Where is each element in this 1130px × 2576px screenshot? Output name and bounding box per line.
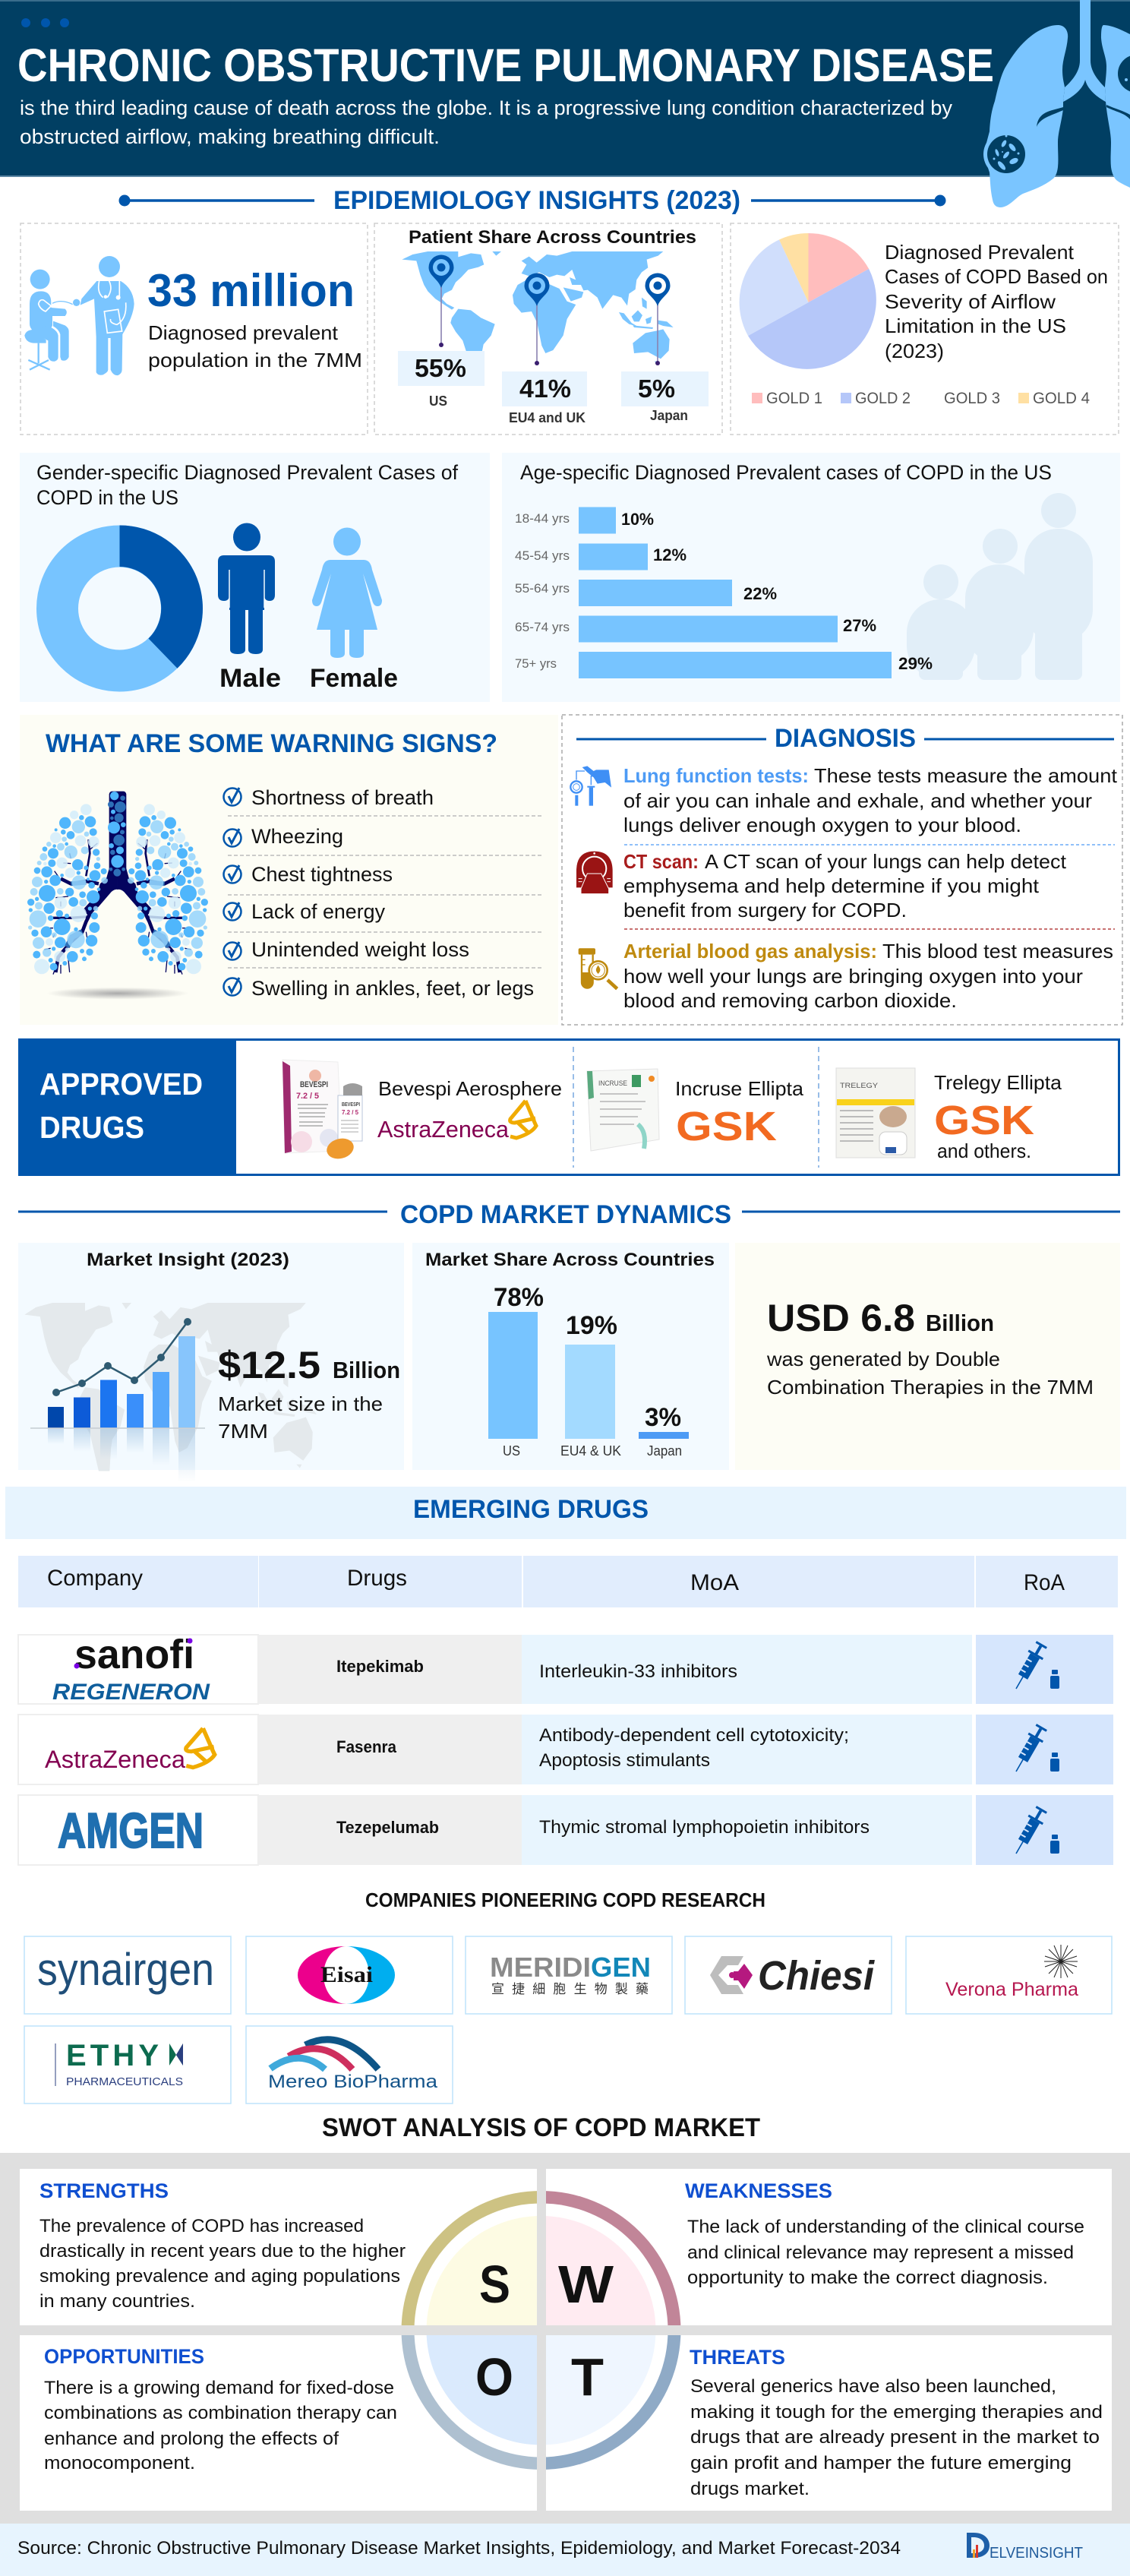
stat: US: 55% [415, 354, 466, 382]
SWOT circle [20, 2169, 1112, 2511]
item: lack of energy: Lack of energy [251, 900, 385, 923]
diagnosis text: CT scan [623, 850, 1067, 921]
bar chart: age groups: 18-44 yrs [515, 511, 570, 526]
world map [402, 251, 674, 366]
growth chart [24, 1303, 317, 1482]
diagnosis text: lung function: of air you can inhale and exhale, and whether your [623, 789, 1092, 812]
icon: lung function test [570, 766, 611, 806]
heading: epidemiology insights [118, 186, 946, 215]
row: Itepekimab: Itepekimab [336, 1657, 424, 1676]
source line: Source: Chronic Obstructive Pulmonary Disease Market Insights, Epidemiology, and Market Forecast-2034 [17, 2538, 901, 2559]
panel: double combination therapies [735, 1243, 1120, 1470]
diagnosis text: CT scan: CT scan: [623, 850, 699, 873]
stat: EU4 and UK: 41% [519, 375, 571, 403]
panel: age-specific cases [502, 453, 1120, 702]
logo: Eisai: Eisai [320, 1962, 373, 1987]
drug: Trelegy Ellipta: Trelegy Ellipta [934, 1071, 1062, 1094]
opportunities: OPPORTUNITIES [44, 2345, 204, 2368]
pie title: Severity of Airflow [885, 290, 1056, 313]
row: Itepekimab [18, 1632, 1113, 1705]
diagnosis text: CT scan: A CT scan of your lungs can help detect [705, 850, 1067, 873]
logo: GSK: GSK [676, 1104, 777, 1149]
product image: Trelegy [836, 1068, 915, 1158]
diagnosis text: blood gas: how well your lungs are bringing oxygen into your [623, 965, 1083, 988]
pie title: Limitation in the US [885, 314, 1066, 337]
panel: warning signs: WHAT ARE SOME WARNING SIGNS? [46, 729, 497, 758]
threats: drugs market. [690, 2479, 810, 2499]
logo: AstraZeneca [45, 1728, 215, 1773]
logo: Ethyx Pharmaceuticals: PHARMACEUTICALS [66, 2075, 183, 2088]
item: swelling: Swelling in ankles, feet, or legs [251, 977, 534, 1000]
panel: market share across countries [412, 1243, 729, 1470]
panel: approved drugs: DRUGS [39, 1110, 144, 1145]
logo: Mereo BioPharma [246, 2026, 453, 2103]
threats: Several generics have also been launched, [690, 2376, 1056, 2397]
diagnosis text: lung function: Lung function tests: [623, 764, 809, 787]
legend: GOLD 4 [1033, 390, 1090, 407]
logo: AstraZeneca [377, 1101, 536, 1143]
stat: Japan [621, 371, 709, 423]
bar chart: age groups: 12% [653, 545, 687, 564]
panel: 33 million [21, 223, 368, 435]
diagnosis text: lung function: lungs deliver enough oxygen to your blood. [623, 814, 1021, 836]
diagnosis text: lung function [623, 764, 1118, 836]
panel: warning signs [20, 715, 558, 1025]
footer [0, 2524, 1130, 2576]
panel: SWOT analysis [0, 2153, 1130, 2524]
icon: syringe [1008, 1640, 1059, 1693]
logo: Meridigen: 宣捷細胞生物製藥 [491, 1982, 649, 1996]
stat: market size [218, 1344, 400, 1443]
logo: Amgen: AMGEN [58, 1803, 204, 1858]
strengths: The prevalence of COPD has increased [39, 2216, 364, 2236]
subtitle [20, 96, 952, 148]
stat: Japan: 5% [638, 375, 675, 403]
bar chart: market share: 19% [566, 1311, 617, 1340]
pie title: Diagnosed Prevalent [885, 241, 1075, 264]
family silhouettes [907, 493, 1093, 680]
panel: diagnosis [562, 715, 1122, 1025]
logo grid: companies [24, 1936, 1112, 2103]
logo: GSK: GSK [934, 1098, 1034, 1143]
product image: Trelegy: TRELEGY [840, 1082, 878, 1089]
logo: Meridigen: GEN [591, 1952, 651, 1983]
icon: doctor and patient [24, 256, 134, 375]
threats: drugs that are already present in the market to [690, 2427, 1100, 2448]
strengths: STRENGTHS [39, 2179, 169, 2202]
legend [752, 390, 1090, 407]
panel: double combination therapies: was generated by Double [766, 1348, 1000, 1370]
threats: making it tough for the emerging therapies and [690, 2402, 1103, 2423]
bar chart: market share: Japan [647, 1443, 682, 1459]
icon: blood gas analysis [579, 948, 617, 989]
pie title: Cases of COPD Based on [885, 265, 1108, 288]
SWOT circle: O [475, 2347, 513, 2407]
table header: MoA [690, 1570, 739, 1595]
table header: RoA [1024, 1570, 1065, 1595]
logo: synairgen: synairgen [37, 1944, 214, 1995]
bar chart: market share: EU4 & UK [560, 1443, 621, 1459]
diagnosis text: blood gas: blood and removing carbon dioxide. [623, 989, 957, 1012]
logo: Meridigen [466, 1936, 672, 2014]
strengths: smoking prevalence and aging populations [39, 2266, 400, 2287]
product image: Bevespi: BEVESPI [300, 1080, 328, 1089]
logo: Ethyx Pharmaceuticals: ETHY [66, 2039, 159, 2072]
logo: AstraZeneca: AstraZeneca [377, 1116, 510, 1143]
row: Fasenra: Antibody-dependent cell cytotoxicity; [539, 1725, 849, 1746]
diagnosis text: CT scan: benefit from surgery for COPD. [623, 899, 907, 921]
stat: market size: $12.5 [218, 1344, 320, 1386]
threats: gain profit and hamper the future emerging [690, 2453, 1072, 2473]
icon: lungs [983, 0, 1130, 207]
logo: Eisai [246, 1936, 453, 2014]
diagnosis text: CT scan: emphysema and help determine if you might [623, 874, 1040, 897]
logo: Ethyx Pharmaceuticals [24, 2026, 231, 2103]
SWOT circle: W [558, 2255, 614, 2314]
diagnosis text: blood gas [623, 940, 1113, 1012]
icon: syringe [1008, 1805, 1059, 1858]
row: Itepekimab: Interleukin-33 inhibitors [539, 1661, 737, 1682]
panel: market share across countries: Market Share Across Countries [425, 1250, 715, 1270]
icon: lungs of dots [27, 792, 208, 1000]
heading: emerging drugs: EMERGING DRUGS [413, 1495, 649, 1524]
bar chart: age groups: 55-64 yrs [515, 581, 570, 596]
bar chart: market share: 78% [494, 1283, 544, 1312]
logo: AstraZeneca: AstraZeneca [45, 1746, 185, 1773]
weaknesses: WEAKNESSES [685, 2179, 832, 2202]
heading: emerging drugs [5, 1487, 1126, 1539]
panel: market insight: Market Insight (2023) [87, 1250, 289, 1270]
legend: GOLD 3 [944, 390, 1000, 407]
heading: SWOT analysis: SWOT ANALYSIS OF COPD MARKET [322, 2113, 760, 2142]
header banner [0, 0, 1130, 177]
SWOT circle: T [571, 2347, 604, 2407]
panel: 33 million: 33 million [147, 265, 355, 316]
product image: Bevespi: 7.2 / 5 [296, 1092, 319, 1101]
panel: age-specific cases: Age-specific Diagnosed Prevalent cases of COPD in the US [520, 461, 1052, 484]
bar chart: age groups: 27% [843, 616, 876, 635]
strengths: in many countries. [39, 2291, 195, 2312]
product image: Bevespi: BEVESPI [342, 1102, 360, 1108]
panel: gender-specific cases [20, 453, 490, 702]
title: CHRONIC OBSTRUCTIVE PULMONARY DISEASE [17, 40, 994, 91]
panel: market insight [18, 1243, 404, 1482]
opportunities [44, 2345, 397, 2473]
threats: THREATS [690, 2346, 785, 2369]
bar chart: age groups: 45-54 yrs [515, 548, 570, 563]
bar chart: age groups: 10% [621, 510, 654, 529]
pie title [885, 241, 1108, 362]
drug: Bevespi Aerosphere: Bevespi Aerosphere [378, 1077, 562, 1100]
diagnosis text: blood gas: This blood test measures [882, 940, 1113, 962]
bar chart: market share: US [503, 1443, 520, 1459]
subtitle: obstructed airflow, making breathing difficult. [20, 125, 440, 148]
drug: Bevespi Aerosphere [282, 1060, 562, 1162]
diagnosis heading: DIAGNOSIS [775, 724, 916, 753]
logo: Verona Pharma: Verona Pharma [945, 1979, 1078, 2000]
stat: EU4 and UK: EU4 and UK [509, 410, 586, 425]
drug: Trelegy Ellipta [836, 1068, 1062, 1162]
logo: Chiesi: Chiesi [758, 1953, 875, 1999]
row: Fasenra: Apoptosis stimulants [539, 1750, 710, 1771]
bar chart: age groups: 29% [898, 654, 933, 673]
icon: female [310, 527, 398, 693]
heading: epidemiology insights: EPIDEMIOLOGY INSIGHTS (2023) [333, 186, 740, 215]
bar chart: age groups: 75+ yrs [515, 656, 557, 671]
legend: GOLD 2 [855, 390, 911, 407]
logo: Regeneron: REGENERON [52, 1680, 210, 1705]
logo: sanofi: sanofi [74, 1632, 194, 1677]
diagnosis text: lung function: These tests measure the amount [814, 764, 1118, 787]
panel: double combination therapies: USD 6.8 [767, 1297, 915, 1339]
checklist [223, 786, 543, 1000]
drug: Incruse Ellipta: Incruse Ellipta [675, 1077, 804, 1100]
weaknesses [685, 2179, 1084, 2288]
stat: US [398, 351, 485, 409]
panel: double combination therapies: Combination Therapies in the 7MM [767, 1376, 1094, 1399]
opportunities: There is a growing demand for fixed-dose [44, 2378, 394, 2398]
icon: CT scan [576, 852, 613, 894]
panel: gender-specific cases: COPD in the US [36, 486, 178, 509]
weaknesses: The lack of understanding of the clinical course [687, 2217, 1084, 2237]
bar chart: market share [488, 1283, 689, 1459]
weaknesses: and clinical relevance may represent a missed [687, 2243, 1074, 2263]
bar chart: market share: 3% [645, 1403, 681, 1432]
item: weight loss: Unintended weight loss [251, 938, 469, 961]
stat: market size: Market size in the [218, 1392, 383, 1415]
product image: Incruse: INCRUSE [598, 1079, 627, 1087]
strengths [39, 2179, 406, 2312]
stat: US: US [429, 394, 447, 409]
drug: Incruse Ellipta [587, 1069, 804, 1151]
pie chart [740, 233, 876, 369]
table header: Company [47, 1566, 143, 1591]
row: Tezepelumab [18, 1795, 1113, 1865]
logo: DelveInsight [967, 2533, 1083, 2562]
item: shortness of breath: Shortness of breath [251, 786, 434, 809]
logo: DelveInsight: ELVEINSIGHT [990, 2545, 1083, 2562]
logo: synairgen [24, 1936, 231, 2014]
panel: 33 million: Diagnosed prevalent [148, 321, 339, 344]
drug: Trelegy Ellipta: and others. [937, 1139, 1031, 1162]
panel: patient share across countries: Patient Share Across Countries [409, 227, 696, 248]
table header [18, 1556, 1118, 1607]
logo: Verona Pharma [906, 1936, 1112, 2014]
logo: Mereo BioPharma: Mereo BioPharma [268, 2072, 438, 2092]
panel: double combination therapies: Billion [926, 1310, 994, 1336]
icon: female: Female [310, 664, 398, 693]
icon: male: Male [219, 664, 281, 693]
panel: approved drugs: APPROVED [39, 1067, 203, 1102]
decorative dots [21, 18, 69, 27]
strengths: drastically in recent years due to the higher [39, 2241, 406, 2262]
logo: Chiesi [685, 1936, 892, 2014]
table header: Drugs [347, 1566, 407, 1591]
weaknesses: opportunity to make the correct diagnosis. [687, 2268, 1048, 2288]
opportunities: combinations as combination therapy can [44, 2403, 397, 2423]
map pins [428, 255, 670, 365]
stat: Japan: Japan [650, 408, 688, 423]
diagnosis text: blood gas: Arterial blood gas analysis: [623, 940, 877, 962]
opportunities: enhance and prolong the effects of [44, 2429, 339, 2449]
threats [690, 2346, 1103, 2499]
icon: syringe [1008, 1723, 1059, 1776]
row: Tezepelumab: Tezepelumab [336, 1818, 439, 1837]
stat: EU4 and UK [502, 371, 587, 425]
legend: GOLD 1 [766, 390, 822, 407]
bar chart: age groups: 22% [743, 584, 777, 603]
pie title: (2023) [885, 340, 944, 362]
bar chart: age groups: 65-74 yrs [515, 620, 570, 634]
product image: Bevespi [282, 1060, 362, 1162]
panel: approved drugs [18, 1038, 1119, 1176]
table: emerging drugs [18, 1556, 1118, 1865]
icon: male [218, 523, 281, 693]
donut chart [58, 526, 203, 671]
row: Fasenra: Fasenra [336, 1737, 397, 1756]
opportunities: monocomponent. [44, 2453, 195, 2473]
row: Fasenra [18, 1715, 1113, 1784]
item: wheezing: Wheezing [251, 825, 343, 848]
heading: companies pioneering COPD research: COMPANIES PIONEERING COPD RESEARCH [365, 1889, 765, 1911]
stat: market size: Billion [333, 1357, 400, 1383]
product image: Bevespi: 7.2 / 5 [342, 1109, 359, 1116]
row: Tezepelumab: Thymic stromal lymphopoietin inhibitors [539, 1817, 870, 1838]
stat: market size: 7MM [218, 1420, 268, 1443]
heading: COPD market dynamics: COPD MARKET DYNAMICS [400, 1200, 731, 1229]
panel: gender-specific cases: Gender-specific Diagnosed Prevalent Cases of [36, 461, 458, 484]
item: chest tightness: Chest tightness [251, 863, 393, 886]
SWOT circle: S [479, 2255, 510, 2314]
panel: severity of airflow limitation [731, 223, 1119, 435]
panel: 33 million: population in the 7MM [148, 349, 362, 371]
lung nodule [983, 131, 1029, 177]
bar chart: age groups [515, 507, 933, 678]
subtitle: is the third leading cause of death across the globe. It is a progressive lung condition characterized by [20, 96, 952, 119]
product image: Incruse [587, 1069, 659, 1151]
logo: Meridigen: MERIDI [490, 1952, 591, 1983]
panel: patient share across countries [374, 223, 722, 435]
